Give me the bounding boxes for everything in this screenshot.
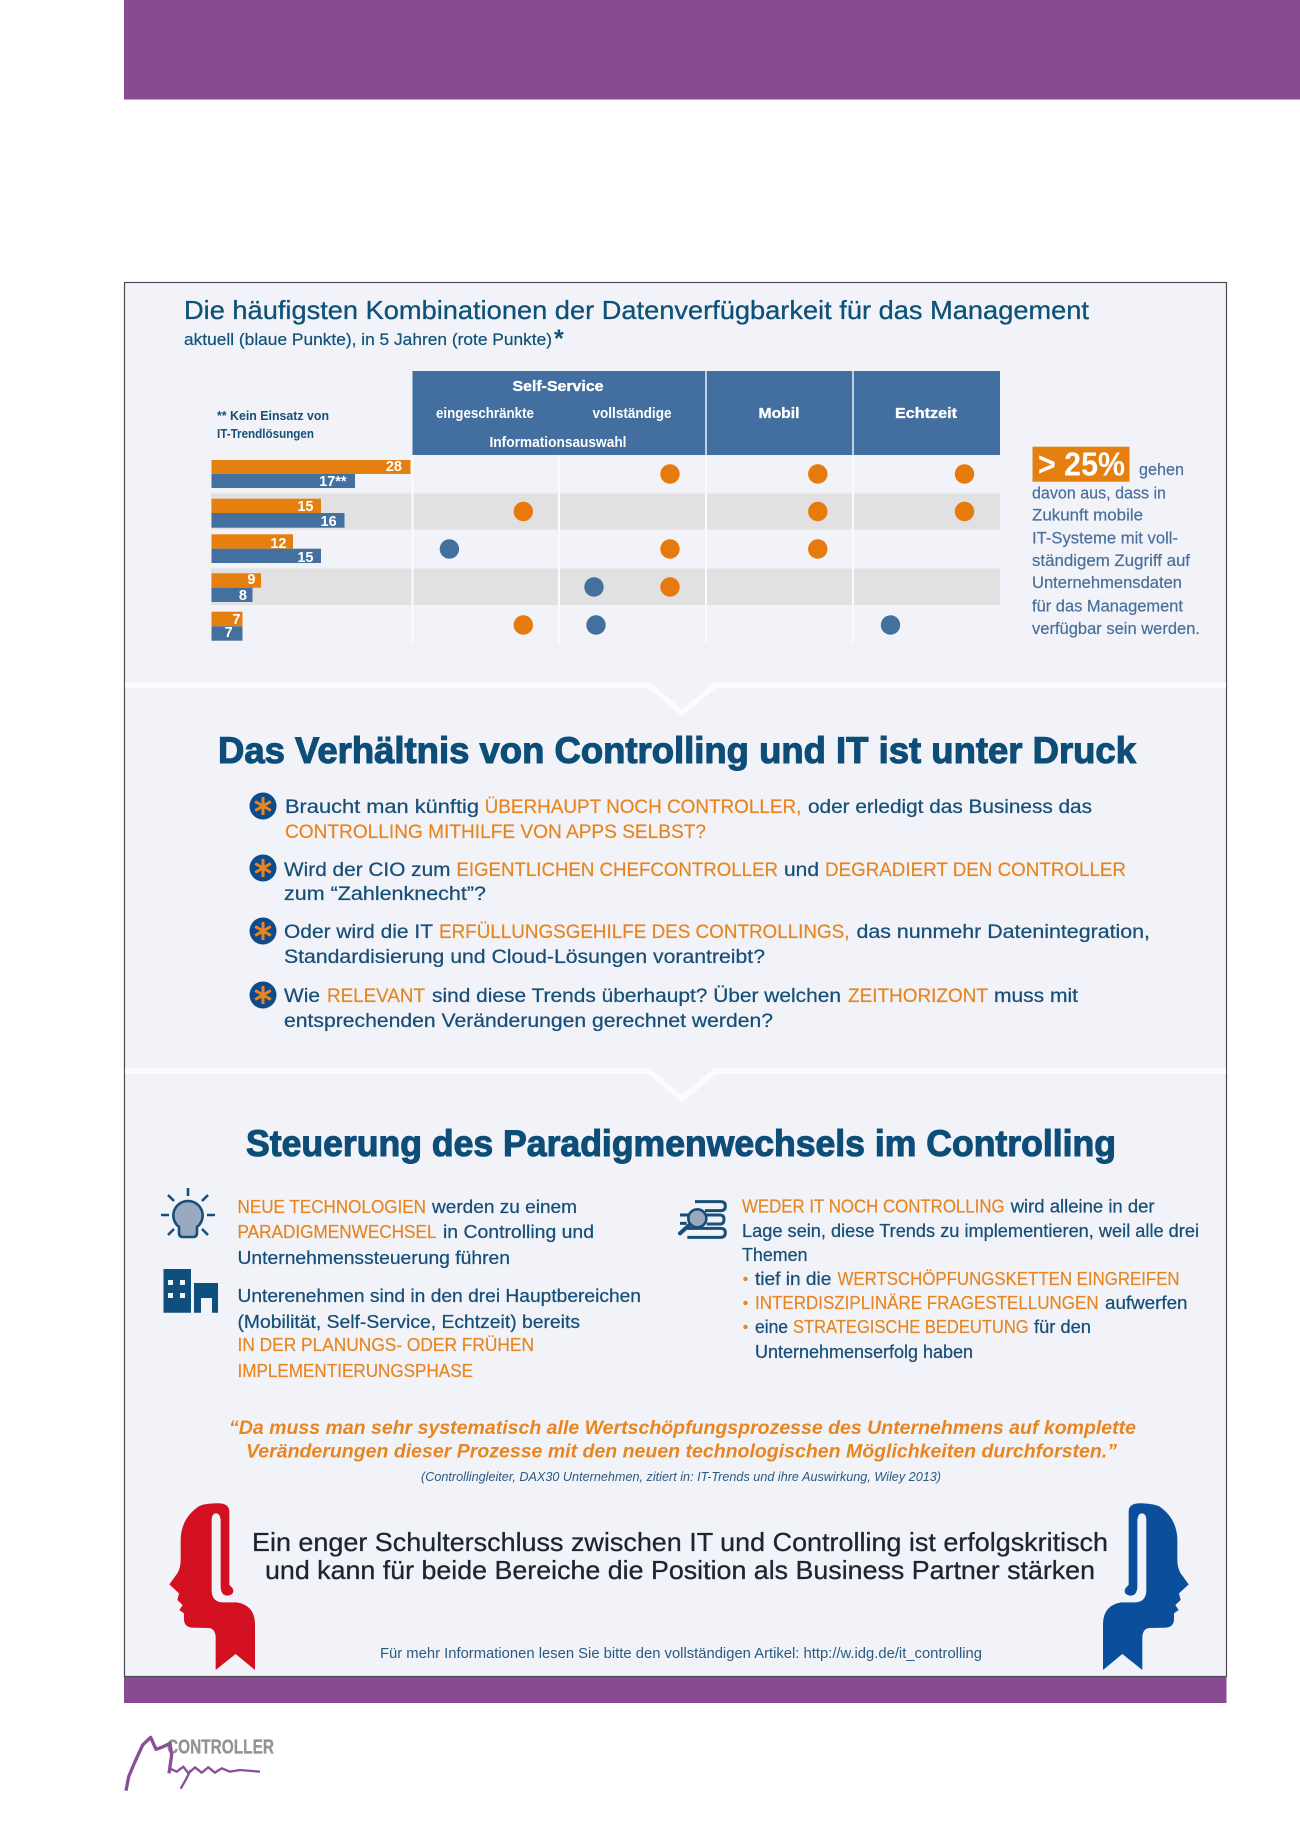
question 3: das nunmehr Datenintegration, — [856, 921, 1150, 943]
table header — [412, 371, 1000, 455]
icon: red head — [169, 1503, 255, 1670]
footnote: no IT trend solutions — [217, 408, 329, 441]
question 1: oder erledigt das Business das — [808, 796, 1092, 818]
question 1: Braucht man künftig — [285, 796, 479, 818]
text: neither IT nor controlling: eine — [755, 1316, 788, 1337]
question 2 — [250, 854, 1126, 905]
bar chart: frequencies: 7 — [232, 612, 240, 628]
callout: more than 25 percent: gehen — [1139, 461, 1184, 479]
question 4: entsprechenden Veränderungen gerechnet werden? — [284, 1010, 773, 1032]
question 1: CONTROLLING MITHILFE VON APPS SELBST? — [285, 821, 706, 843]
footnote: no IT trend solutions: ** Kein Einsatz von — [217, 408, 329, 423]
question 3: Standardisierung und Cloud-Lösungen vorantreibt? — [284, 946, 765, 968]
section: steering the paradigm shift — [161, 1123, 1199, 1484]
question 4: Wie — [284, 985, 320, 1007]
text: neither IT nor controlling: wird alleine in der — [1010, 1196, 1155, 1217]
question 2: EIGENTLICHEN CHEFCONTROLLER — [456, 859, 778, 881]
text: new technologies: in Controlling und — [443, 1221, 594, 1242]
callout: more than 25 percent: Zukunft mobile — [1032, 507, 1143, 525]
text: new technologies: PARADIGMENWECHSEL — [238, 1221, 436, 1242]
infographic panel — [124, 282, 1226, 1676]
callout: more than 25 percent: davon aus, dass in — [1032, 484, 1166, 502]
text: new technologies: NEUE TECHNOLOGIEN — [238, 1196, 426, 1217]
question 3: ERFÜLLUNGSGEHILFE DES CONTROLLINGS, — [439, 921, 850, 943]
question 4: muss mit — [994, 985, 1079, 1007]
text: new technologies — [238, 1196, 594, 1268]
table column dividers — [412, 455, 853, 643]
icon: light bulb — [161, 1188, 215, 1237]
question 4 — [250, 982, 1079, 1032]
chart title: Die häufigsten Kombinationen der Datenverfügbarkeit für das Management — [184, 295, 1090, 325]
question 4: ZEITHORIZONT — [848, 985, 988, 1007]
quote: “Da muss man sehr systematisch alle Wertschöpfungsprozesse des Unternehmens auf komplette — [229, 1417, 1136, 1439]
question 1: ÜBERHAUPT NOCH CONTROLLER, — [485, 796, 801, 818]
question 4: RELEVANT — [327, 985, 425, 1007]
quote — [229, 1417, 1136, 1462]
section: controlling and IT under pressure — [218, 730, 1150, 1032]
text: neither IT nor controlling: aufwerfen — [1105, 1292, 1188, 1313]
grey table rows — [211, 494, 1000, 605]
icon: blue head — [1103, 1503, 1189, 1670]
quote: Veränderungen dieser Prozesse mit den neuen technologischen Möglichkeiten durchforsten.” — [246, 1440, 1117, 1462]
callout: more than 25 percent: für das Management — [1032, 598, 1183, 616]
bar chart: frequencies: 28 — [386, 459, 402, 475]
logo: Controller Magazin: CONTROLLER — [167, 1736, 274, 1758]
footnote: no IT trend solutions: IT-Trendlösungen — [217, 426, 314, 441]
text: new technologies: werden zu einem — [431, 1196, 577, 1217]
text: neither IT nor controlling — [742, 1196, 1199, 1362]
bar chart: frequencies: 12 — [270, 536, 286, 552]
table header: eingeschränkte — [436, 406, 534, 422]
quote source: (Controllingleiter, DAX30 Unternehmen, zitiert in: IT-Trends und ihre Auswirkung, Wiley 2013) — [421, 1470, 941, 1484]
bottom purple bar — [124, 1676, 1226, 1703]
text: companies in planning phase — [238, 1285, 641, 1381]
arrow divider 2 — [125, 1071, 1226, 1099]
conclusion statement: und kann für beide Bereiche die Position als Business Partner stärken — [265, 1555, 1095, 1585]
conclusion statement: Ein enger Schulterschluss zwischen IT und Controlling ist erfolgskritisch — [252, 1527, 1108, 1557]
bar chart: frequencies: 7 — [225, 625, 233, 641]
callout: more than 25 percent: verfügbar sein werden. — [1032, 620, 1200, 638]
question 2: Wird der CIO zum — [284, 859, 450, 881]
matrix dots: blue current — [440, 539, 900, 635]
table header: Mobil — [758, 405, 800, 422]
bar chart: frequencies: 15 — [297, 499, 314, 515]
text: neither IT nor controlling: tief in die — [755, 1268, 831, 1289]
text: companies in planning phase: IMPLEMENTIERUNGSPHASE — [238, 1360, 473, 1381]
table header: Informationsauswahl — [490, 435, 626, 451]
text: neither IT nor controlling: Themen — [742, 1244, 808, 1265]
text: neither IT nor controlling: Unternehmenserfolg haben — [755, 1341, 973, 1362]
chart subtitle: aktuell (blaue Punkte), in 5 Jahren (rote Punkte) — [184, 330, 552, 349]
matrix dots: orange in 5 years — [514, 464, 974, 635]
table header: Self-Service — [512, 378, 604, 395]
footnote asterisk: * — [554, 325, 564, 353]
text: neither IT nor controlling: für den — [1034, 1316, 1091, 1337]
text: new technologies: Unternehmenssteuerung führen — [238, 1247, 510, 1268]
bar chart: frequencies: 15 — [297, 550, 314, 566]
table header: vollständige — [592, 406, 672, 422]
text: companies in planning phase: (Mobilität, Self-Service, Echtzeit) bereits — [238, 1311, 580, 1332]
bar chart: frequencies: 9 — [247, 572, 256, 588]
heading: Steuerung des Paradigmenwechsels im Controlling — [246, 1123, 1116, 1164]
link to full article: Für mehr Informationen lesen Sie bitte den vollständigen Artikel: http://w.idg.de/it_controlling — [380, 1646, 982, 1662]
top purple banner — [124, 0, 1300, 100]
question 2: und — [784, 859, 819, 881]
text: neither IT nor controlling: INTERDISZIPLINÄRE FRAGESTELLUNGEN — [755, 1292, 1099, 1313]
question 2: zum “Zahlenknecht”? — [284, 883, 486, 905]
callout: more than 25 percent: Unternehmensdaten — [1032, 574, 1182, 592]
icon: documents with magnifier — [680, 1202, 725, 1237]
bar chart: frequencies: 16 — [321, 514, 337, 530]
callout: more than 25 percent: ständigem Zugriff auf — [1032, 552, 1190, 570]
bar chart: frequencies: 8 — [239, 588, 247, 604]
table header: Echtzeit — [895, 405, 957, 422]
question 3: Oder wird die IT — [284, 921, 433, 943]
icon: buildings — [164, 1269, 218, 1313]
question 2: DEGRADIERT DEN CONTROLLER — [825, 859, 1126, 881]
logo: Controller Magazin — [126, 1736, 274, 1791]
bar chart: frequencies — [212, 459, 410, 641]
callout: more than 25 percent: > 25% — [1038, 446, 1125, 482]
question 3 — [250, 918, 1150, 968]
arrow divider 1 — [125, 685, 1226, 713]
callout: more than 25 percent: IT-Systeme mit voll- — [1032, 529, 1178, 547]
text: companies in planning phase: IN DER PLANUNGS- ODER FRÜHEN — [238, 1334, 534, 1355]
heading: Das Verhältnis von Controlling und IT ist unter Druck — [218, 730, 1136, 771]
text: neither IT nor controlling: WEDER IT NOCH CONTROLLING — [742, 1196, 1005, 1217]
text: neither IT nor controlling: WERTSCHÖPFUNGSKETTEN EINGREIFEN — [838, 1268, 1180, 1289]
bar chart: frequencies: 17** — [319, 474, 347, 490]
callout: more than 25 percent — [1032, 446, 1200, 638]
section: data availability combinations — [184, 295, 1200, 643]
text: neither IT nor controlling: STRATEGISCHE BEDEUTUNG — [793, 1316, 1029, 1337]
text: companies in planning phase: Unterenehmen sind in den drei Hauptbereichen — [238, 1285, 641, 1306]
question 1 — [250, 792, 1092, 843]
question 4: sind diese Trends überhaupt? Über welchen — [432, 985, 841, 1007]
text: neither IT nor controlling: Lage sein, diese Trends zu implementieren, weil alle drei — [742, 1220, 1199, 1241]
conclusion statement — [252, 1527, 1108, 1585]
